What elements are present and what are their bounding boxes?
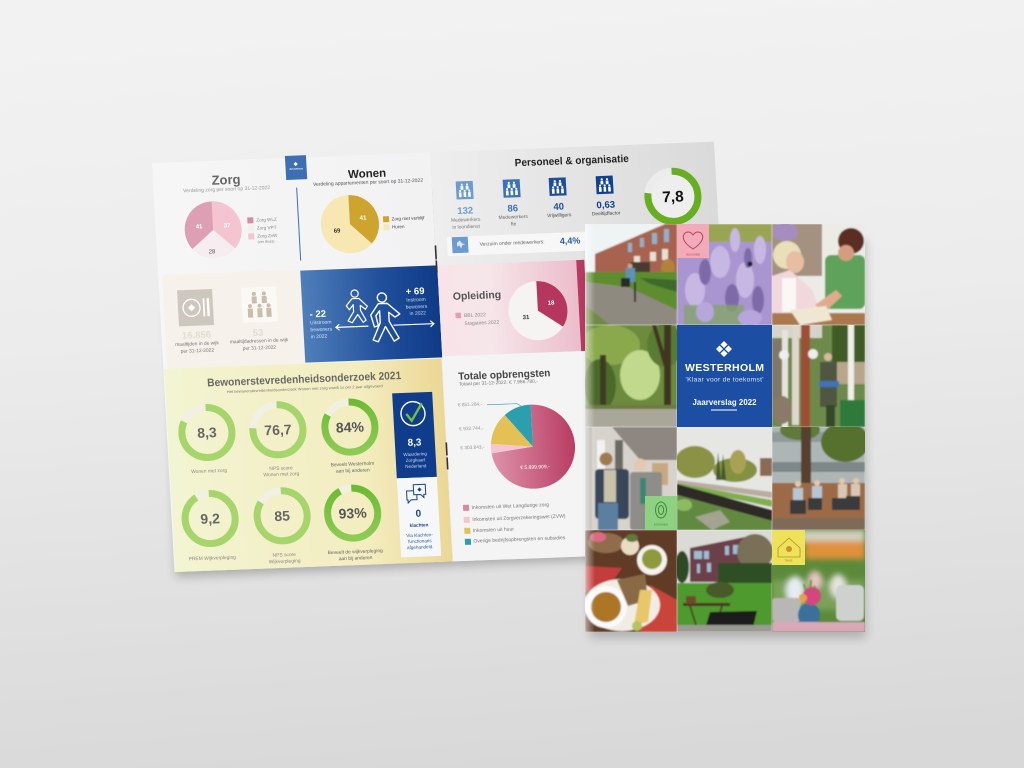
stat: 53 maaltijdadressen bbox=[229, 327, 289, 352]
booklet shadow bbox=[165, 170, 710, 577]
photo: man at porch bbox=[772, 325, 865, 427]
pie labels: € 303.843,- bbox=[460, 444, 485, 451]
icon square: pink heart bbox=[677, 224, 709, 258]
pie labels: € 851.284,- bbox=[458, 401, 483, 408]
icon square: yellow house: THUIS bbox=[785, 558, 793, 562]
callout: Zorgkaart Nederland: Zorgkaart bbox=[405, 457, 426, 463]
stat: 0,63 deeltijdfactor: 0,63 bbox=[596, 200, 615, 211]
stat: 132 medewerkers bbox=[449, 181, 482, 231]
ring: Beveelt de wijkverpleging: aan bij anderen bbox=[339, 555, 373, 562]
icon square: yellow house bbox=[772, 530, 805, 565]
panel: instroom en uitstroom bbox=[300, 265, 442, 363]
legend: Zorg: Zorg WLZ bbox=[256, 217, 277, 223]
stat: instroom: in 2022 bbox=[409, 310, 426, 317]
panel: Zorg bbox=[182, 170, 279, 259]
pie chart: Zorg bbox=[183, 200, 243, 259]
stat: 53 maaltijdadressen: per 31-12-2022 bbox=[243, 345, 277, 352]
verzuim strip: 4,4% bbox=[560, 235, 581, 246]
ring: Beveelt Westerholm: aan bij anderen bbox=[336, 467, 370, 475]
ring: Beveelt de wijkverpleging: 93% bbox=[338, 505, 368, 522]
stat: 132 medewerkers: in loondienst bbox=[452, 224, 481, 231]
heading: Bewonerstevredenheidsonderzoek: Bewonerstevredenheidsonderzoek 2021 bbox=[207, 370, 402, 389]
stat: 16.856 maaltijden bbox=[174, 329, 220, 355]
ring: Wonen met zorg: Wonen met zorg bbox=[191, 468, 227, 475]
callout: klachten: Via klachten- bbox=[406, 532, 433, 538]
callout: klachten: afgehandeld. bbox=[407, 544, 434, 550]
panel: cover title bbox=[677, 325, 772, 427]
ring: NPS Wijkverpleging: NPS score bbox=[272, 552, 296, 559]
callout: klachten: 0 bbox=[415, 509, 422, 520]
legend: Wonen: Huren bbox=[392, 224, 405, 230]
legend: Zorg: Zorg ZvW bbox=[257, 233, 278, 239]
heading: Opleiding: Opleiding bbox=[452, 289, 501, 303]
legend: opbrengsten: Inkomsten uit Zorgverzekeringswet (ZVW) bbox=[472, 514, 566, 523]
photo: garden and pond bbox=[677, 428, 772, 530]
ring: NPS Wonen met zorg: Wonen met zorg bbox=[263, 471, 300, 478]
pie chart: opbrengsten bbox=[489, 403, 577, 490]
icon: plate and cutlery bbox=[177, 289, 214, 326]
ring: Beveelt Westerholm: Beveelt Westerholm bbox=[330, 461, 374, 468]
subtitle: onderzoek: Het bewonerstevredenheidsonderzoek Wonen met zorg wordt 1x per 2 jaar uitgevoerd bbox=[227, 384, 383, 394]
ring: NPS Wonen met zorg: 76,7 bbox=[264, 421, 292, 438]
ring: NPS Wijkverpleging: Wijkverpleging bbox=[269, 558, 301, 565]
cover shadow bbox=[590, 240, 866, 638]
pie chart: Opleiding bbox=[507, 280, 569, 341]
photo: building with cyclist bbox=[585, 224, 677, 325]
pie chart: Wonen: 41 bbox=[360, 215, 367, 222]
stat: uitstroom: Uitstroom bbox=[310, 320, 332, 326]
stat: instroom: bewoners bbox=[405, 304, 428, 311]
stat: 132 medewerkers: Medewerkers bbox=[451, 217, 481, 224]
ring: PREM Wijkverpleging: PREM Wijkverpleging bbox=[189, 555, 236, 562]
stat: 16.856 maaltijden: maaltijden in de wijk bbox=[175, 340, 220, 348]
stat: 53 maaltijdadressen: maaltijdadressen in de wijk bbox=[230, 337, 289, 345]
pie labels bbox=[458, 400, 525, 451]
stat: uitstroom: in 2022 bbox=[311, 334, 328, 340]
arrow: uitstroom bbox=[336, 323, 369, 330]
left page background bbox=[152, 152, 452, 572]
legend: Opleiding bbox=[455, 311, 500, 327]
stat: instroom: + 69 bbox=[405, 286, 425, 298]
heading: Wonen: Wonen bbox=[348, 168, 386, 181]
stat: instroom: Instroom bbox=[406, 297, 426, 304]
icon: small walker bbox=[345, 290, 368, 323]
panel: Totale opbrengsten bbox=[442, 346, 736, 561]
callout: klachten: functionaris bbox=[408, 538, 432, 544]
stat: 40 vrijwilligers: Vrijwilligers bbox=[547, 212, 572, 219]
icon: large walker bbox=[370, 292, 401, 342]
legend: opbrengsten bbox=[463, 501, 567, 545]
stat: uitstroom: - 22 bbox=[309, 309, 326, 320]
ring: NPS Wonen met zorg bbox=[252, 404, 306, 479]
ring: NPS Wijkverpleging: 85 bbox=[274, 508, 291, 524]
legend: Wonen bbox=[383, 215, 426, 230]
ring: 7,8 bbox=[647, 170, 699, 222]
legend: opbrengsten: Inkomsten uit Wet Langdurige zorg bbox=[471, 502, 549, 511]
pie chart: Zorg: 28 bbox=[209, 249, 216, 256]
stat: 0,63 deeltijdfactor bbox=[590, 175, 621, 217]
photo: two people in corridor bbox=[585, 427, 677, 530]
stat: 16.856 maaltijden: per 31-12-2022 bbox=[181, 348, 215, 355]
icon square: green fingerprint: EIGENHEID bbox=[654, 522, 668, 526]
subtitle: tagline: 'Klaar voor de toekomst' bbox=[686, 376, 764, 384]
icon square: green fingerprint bbox=[645, 496, 677, 530]
stat: uitstroom bbox=[309, 309, 333, 340]
subtitle: Totale opbrengsten: Totaal per 31-12-2022: € 7.986.780,- bbox=[459, 379, 538, 388]
verzuim strip bbox=[447, 227, 720, 256]
ring: Beveelt de wijkverpleging bbox=[324, 487, 384, 563]
title: Jaarverslag: Jaarverslag 2022 bbox=[692, 398, 757, 407]
stat: uitstroom: bewoners bbox=[310, 327, 333, 333]
stat: 132 medewerkers: 132 bbox=[457, 205, 474, 217]
pie chart: Opleiding: 31 bbox=[523, 315, 530, 321]
logo tab: WESTERHOLM bbox=[289, 168, 303, 171]
stat: 86 fte bbox=[496, 179, 529, 228]
photo: flowers and blurred residents bbox=[772, 530, 865, 632]
icon: Westerholm logo bbox=[716, 341, 732, 357]
stat: 86 fte: 86 bbox=[507, 203, 518, 215]
ring: Beveelt Westerholm: 84% bbox=[335, 419, 365, 436]
legend: Wonen: Zorg met verblijf bbox=[391, 215, 425, 222]
pie chart: Wonen: 69 bbox=[334, 228, 341, 235]
photo: residents outdoors bbox=[772, 427, 865, 530]
legend: Opleiding: BBL 2022 bbox=[464, 312, 486, 319]
callout: klachten: klachten bbox=[410, 522, 429, 528]
divider bbox=[297, 188, 301, 261]
stat: 86 fte: fte bbox=[511, 221, 517, 228]
staples bbox=[435, 245, 449, 469]
callout: klachten bbox=[397, 477, 441, 557]
open booklet: inside spread bbox=[152, 140, 736, 572]
icon: people group bbox=[241, 287, 278, 323]
ring: NPS Wonen met zorg: NPS score bbox=[269, 465, 293, 472]
pie chart: opbrengsten: € 5.899.909,- bbox=[520, 464, 550, 471]
photo: garden table bbox=[677, 530, 772, 632]
stat: 86 fte: Medewerkers bbox=[498, 214, 529, 221]
heading: Personeel en organisatie: Personeel & organisatie bbox=[514, 153, 629, 169]
panel: Opleiding bbox=[437, 260, 589, 356]
logo tab bbox=[285, 155, 307, 180]
heading: Zorg: Zorg bbox=[211, 172, 241, 188]
panel: maaltijden bbox=[162, 270, 305, 369]
pie chart: Zorg: 41 bbox=[196, 224, 203, 230]
subtitle: Wonen: Verdeling appartementen per soort op 31-12-2022 bbox=[313, 178, 423, 188]
ring: Wonen met zorg bbox=[181, 407, 234, 475]
ring: PREM Wijkverpleging: 9,2 bbox=[200, 510, 221, 527]
legend: Zorg: (ver thuis) bbox=[257, 239, 275, 244]
photo: two women at table bbox=[772, 224, 865, 325]
cover: Jaarverslag bbox=[580, 223, 869, 632]
ring: PREM Wijkverpleging bbox=[184, 493, 237, 562]
legend: opbrengsten: Overige bedrijfsopbrengsten en subsidies bbox=[473, 535, 566, 545]
legend: Zorg: Zorg VPT bbox=[257, 225, 277, 231]
legend: Opleiding: Stagiaires 2022 bbox=[464, 320, 500, 327]
panel: Wonen bbox=[312, 166, 427, 254]
right page background bbox=[430, 142, 736, 561]
stat: 0,63 deeltijdfactor: Deeltijdfactor bbox=[592, 210, 621, 217]
cover left edge fade bbox=[585, 224, 595, 632]
icon square: pink heart: VEILIGHEID bbox=[686, 252, 700, 256]
subtitle: Zorg: Verdeling zorg per soort op 31-12-2022 bbox=[183, 185, 270, 194]
callout: Zorgkaart Nederland: Nederland bbox=[405, 463, 427, 469]
ring: 7,8: 7,8 bbox=[662, 188, 685, 206]
stat: 40 vrijwilligers: 40 bbox=[553, 201, 564, 213]
callout: Zorgkaart Nederland: 8,3 bbox=[407, 437, 422, 449]
heading: Totale opbrengsten: Totale opbrengsten bbox=[458, 367, 551, 383]
callout: Zorgkaart Nederland bbox=[392, 392, 437, 478]
pie chart: Wonen bbox=[319, 194, 381, 254]
ring: NPS Wijkverpleging bbox=[256, 490, 310, 566]
callout: Zorgkaart Nederland: Waardering bbox=[403, 451, 427, 457]
photo: tree lane bbox=[585, 325, 677, 427]
stat: 53 maaltijdadressen: 53 bbox=[252, 328, 264, 339]
title: Westerholm: WESTERHOLM bbox=[685, 362, 764, 374]
arrow: instroom bbox=[393, 321, 434, 328]
verzuim strip: Verzuim onder medewerkers: bbox=[480, 239, 545, 248]
ring: Wonen met zorg: 8,3 bbox=[197, 424, 217, 441]
photo: lavender bbox=[677, 224, 772, 325]
ring: Beveelt Westerholm bbox=[324, 401, 377, 475]
legend: Zorg bbox=[247, 216, 278, 245]
stat: 16.856 maaltijden: 16.856 bbox=[182, 330, 211, 342]
panel: Bewonerstevredenheidsonderzoek bbox=[164, 358, 452, 572]
stat: instroom bbox=[404, 286, 428, 317]
pie labels: € 932.744,- bbox=[459, 425, 484, 432]
pie chart: Opleiding: 18 bbox=[548, 301, 555, 307]
photo: food on table bbox=[585, 530, 677, 632]
legend: opbrengsten: Inkomsten uit huur bbox=[473, 527, 514, 534]
pie chart: Zorg: 37 bbox=[224, 223, 231, 229]
ring: Beveelt de wijkverpleging: Beveelt de wijkverpleging bbox=[328, 548, 383, 556]
stat: 40 vrijwilligers bbox=[545, 177, 572, 219]
